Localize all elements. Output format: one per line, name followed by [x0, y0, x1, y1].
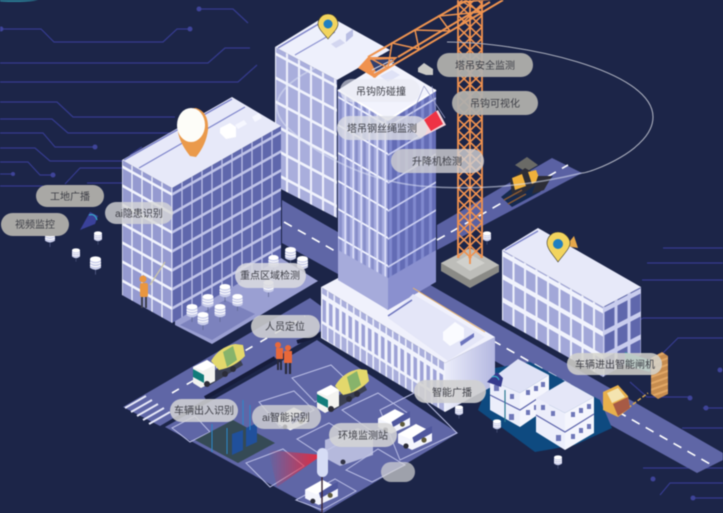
- pin: orange: [177, 108, 208, 157]
- smart gate: [625, 352, 668, 408]
- label: 环境监测站: 环境监测站: [338, 429, 388, 442]
- crane mast: [458, 0, 482, 264]
- top-left teal accent: [0, 0, 42, 2]
- ground: access road with crosswalk: [123, 298, 340, 426]
- label: 工地广播: [36, 185, 104, 207]
- parking lot: [165, 335, 458, 513]
- label: 塔吊钢丝绳监测: 塔吊钢丝绳监测: [347, 122, 417, 135]
- label: 智能广播: [414, 380, 486, 403]
- mixer truck 2: [317, 369, 369, 413]
- crane base: [441, 248, 499, 288]
- label: 塔吊安全监测: 塔吊安全监测: [455, 59, 515, 72]
- large truck: [325, 428, 373, 466]
- yellow truck: [603, 385, 630, 417]
- servers: left cluster: [45, 230, 102, 275]
- label: 吊钩防碰撞: 吊钩防碰撞: [356, 85, 406, 98]
- orbit ring: [447, 42, 653, 173]
- road: upper right: [437, 158, 582, 250]
- label: partial pill bottom: [381, 462, 415, 482]
- circuit lines left: [0, 6, 257, 186]
- label: 视频监控: [1, 213, 69, 236]
- servers: right cluster: [455, 231, 562, 469]
- building: left: [122, 97, 281, 323]
- workers: [275, 342, 292, 374]
- label: 人员定位: 人员定位: [265, 320, 305, 333]
- label: ai智能识别: [252, 405, 321, 429]
- label: ai隐患识别: ai隐患识别: [115, 208, 163, 220]
- pin: yellow tower: [318, 14, 338, 39]
- label: 智能广播: 智能广播: [432, 386, 472, 399]
- crane jib: [358, 0, 505, 78]
- label: 车辆进出智能闸机: [567, 353, 662, 375]
- label: 吊钩防碰撞: [340, 79, 420, 102]
- building: back tower: [275, 15, 390, 218]
- key monitoring pad: [175, 258, 318, 344]
- mixer truck 1: [193, 344, 245, 388]
- label: 吊钩可视化: [452, 91, 538, 115]
- building: podium: [321, 250, 495, 412]
- label: 视频监控: 视频监控: [15, 218, 55, 231]
- label: 升降机检测: [391, 149, 484, 173]
- pin: yellow right building: [547, 232, 570, 262]
- label: 环境监测站: [329, 423, 397, 447]
- icon: broadcast horn left: [80, 212, 98, 230]
- hoisted load: [410, 86, 446, 138]
- servers: pad cluster: [187, 247, 308, 330]
- small crane counterweight block: [418, 63, 433, 75]
- loader machine: [501, 157, 553, 207]
- vans: [278, 407, 432, 505]
- label: 重点区域检测: 重点区域检测: [240, 269, 300, 282]
- worker on building: [140, 262, 165, 308]
- orbit ring light band: [277, 68, 582, 188]
- label: 车辆进出智能闸机: 车辆进出智能闸机: [575, 358, 655, 371]
- label: 工地广播: 工地广播: [50, 190, 90, 203]
- gate equipment area: [195, 400, 275, 463]
- label: 车辆出入识别: 车辆出入识别: [174, 404, 234, 417]
- label: 塔吊钢丝绳监测: [337, 116, 427, 140]
- building: front tower: [338, 60, 436, 310]
- label: ai智能识别: ai智能识别: [262, 411, 310, 424]
- environmental monitoring station: [317, 448, 328, 513]
- circuit lines right: [630, 248, 723, 500]
- label: 升降机检测: 升降机检测: [412, 155, 462, 168]
- label: 重点区域检测: [235, 263, 306, 288]
- environmental monitoring red beam: [268, 450, 322, 487]
- building: right: [502, 228, 641, 377]
- label: 吊钩可视化: 吊钩可视化: [470, 97, 520, 110]
- icon: broadcast horn right: [487, 372, 503, 387]
- small building 2: [536, 381, 594, 450]
- label: 车辆出入识别: [170, 399, 238, 422]
- glow under small buildings: [478, 362, 612, 452]
- label: 人员定位: [251, 315, 320, 338]
- label: 塔吊安全监测: [437, 53, 533, 77]
- label: ai隐患识别: [105, 202, 173, 224]
- small building 1: [490, 359, 549, 427]
- road: main diagonal: [282, 200, 723, 473]
